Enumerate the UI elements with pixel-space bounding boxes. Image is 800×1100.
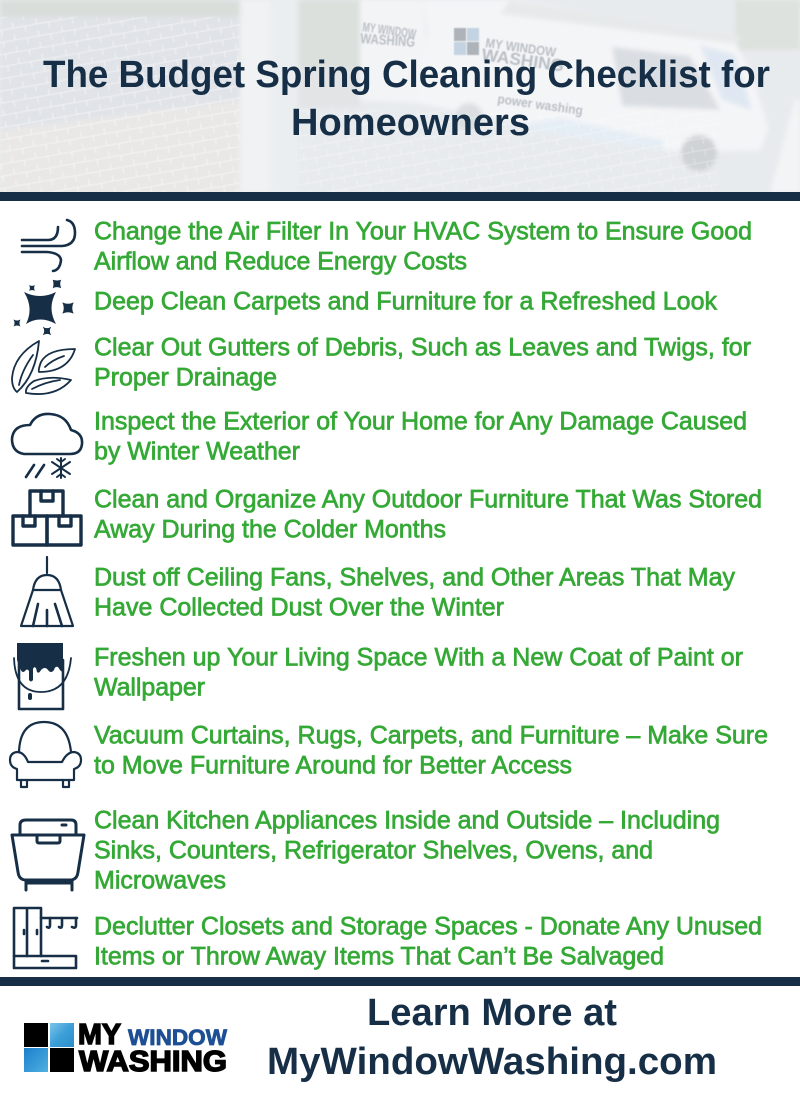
van lettering in photo: WASHING: [480, 45, 565, 76]
icon: wind: [22, 220, 75, 271]
item 1: air filter: Change the Air Filter In Your HVAC System to Ensure Good: [94, 218, 752, 246]
bottom divider bar: [0, 977, 800, 986]
van lettering in photo: MY WINDOW: [485, 35, 558, 60]
item 7: paint: Freshen up Your Living Space With a New Coat of Paint or: [94, 644, 743, 672]
item 2: carpets: [10, 276, 717, 339]
item 10: closets: Items or Throw Away Items That Can’t Be Salvaged: [94, 942, 664, 970]
icon: closet: [14, 908, 77, 968]
van lettering in photo: power washing: [497, 91, 584, 118]
van lettering in photo: WASHING: [360, 30, 416, 50]
header background photo: [0, 0, 800, 193]
item 5: outdoor furniture: Clean and Organize Any Outdoor Furniture That Was Stored: [94, 486, 762, 514]
logo: [24, 1019, 227, 1078]
footer call to action: MyWindowWashing.com: [267, 1041, 717, 1083]
logo: MY: [78, 1019, 121, 1051]
checklist: [10, 218, 768, 970]
item 9: kitchen: Clean Kitchen Appliances Inside and Outside – Including: [94, 806, 720, 834]
item 5: outdoor furniture: [13, 486, 762, 545]
icon: armchair: [10, 722, 81, 787]
icon: broom: [21, 557, 73, 626]
icon: paint can: [14, 643, 71, 709]
item 10: closets: [14, 908, 762, 970]
item 1: air filter: Airflow and Reduce Energy Costs: [94, 248, 467, 276]
item 2: carpets: Deep Clean Carpets and Furniture for a Refreshed Look: [94, 288, 718, 316]
item 8: vacuum: Vacuum Curtains, Rugs, Carpets, and Furniture – Make Sure: [94, 722, 768, 750]
icon: boxes: [13, 491, 81, 545]
item 6: dusting: Have Collected Dust Over the Winter: [94, 594, 504, 622]
icon: leaves: [12, 341, 75, 394]
logo: WASHING: [79, 1046, 227, 1078]
footer call to action: [267, 992, 717, 1083]
icon: cloud with snow: [12, 414, 82, 478]
item 6: dusting: [21, 557, 736, 626]
item 8: vacuum: to Move Furniture Around for Better Access: [94, 752, 572, 780]
footer call to action: Learn More at: [367, 992, 617, 1034]
icon: dishwasher: [12, 820, 84, 890]
item 8: vacuum: [10, 722, 768, 787]
item 4: exterior: [12, 408, 747, 478]
item 7: paint: [14, 643, 743, 709]
item 6: dusting: Dust off Ceiling Fans, Shelves, and Other Areas That May: [94, 564, 736, 592]
title: Homeowners: [291, 102, 530, 144]
item 4: exterior: Inspect the Exterior of Your Home for Any Damage Caused: [94, 408, 747, 436]
van lettering in photo: [360, 19, 584, 118]
item 9: kitchen: [12, 806, 720, 894]
item 3: gutters: Clear Out Gutters of Debris, Such as Leaves and Twigs, for: [94, 334, 751, 362]
van lettering in photo: MY WINDOW: [362, 19, 418, 42]
icon: sparkles: [10, 276, 79, 339]
item 5: outdoor furniture: Away During the Colder Months: [94, 516, 446, 544]
title: [43, 54, 770, 144]
item 1: air filter: [22, 218, 752, 276]
item 10: closets: Declutter Closets and Storage Spaces - Donate Any Unused: [94, 912, 762, 940]
item 3: gutters: [12, 334, 751, 394]
item 7: paint: Wallpaper: [94, 674, 205, 702]
logo: WINDOW: [128, 1025, 227, 1050]
title: The Budget Spring Cleaning Checklist for: [43, 54, 770, 96]
item 9: kitchen: Sinks, Counters, Refrigerator Shelves, Ovens, and: [94, 836, 653, 864]
top divider bar: [0, 192, 800, 201]
item 3: gutters: Proper Drainage: [94, 364, 277, 392]
item 9: kitchen: Microwaves: [94, 866, 226, 894]
item 4: exterior: by Winter Weather: [94, 438, 300, 466]
